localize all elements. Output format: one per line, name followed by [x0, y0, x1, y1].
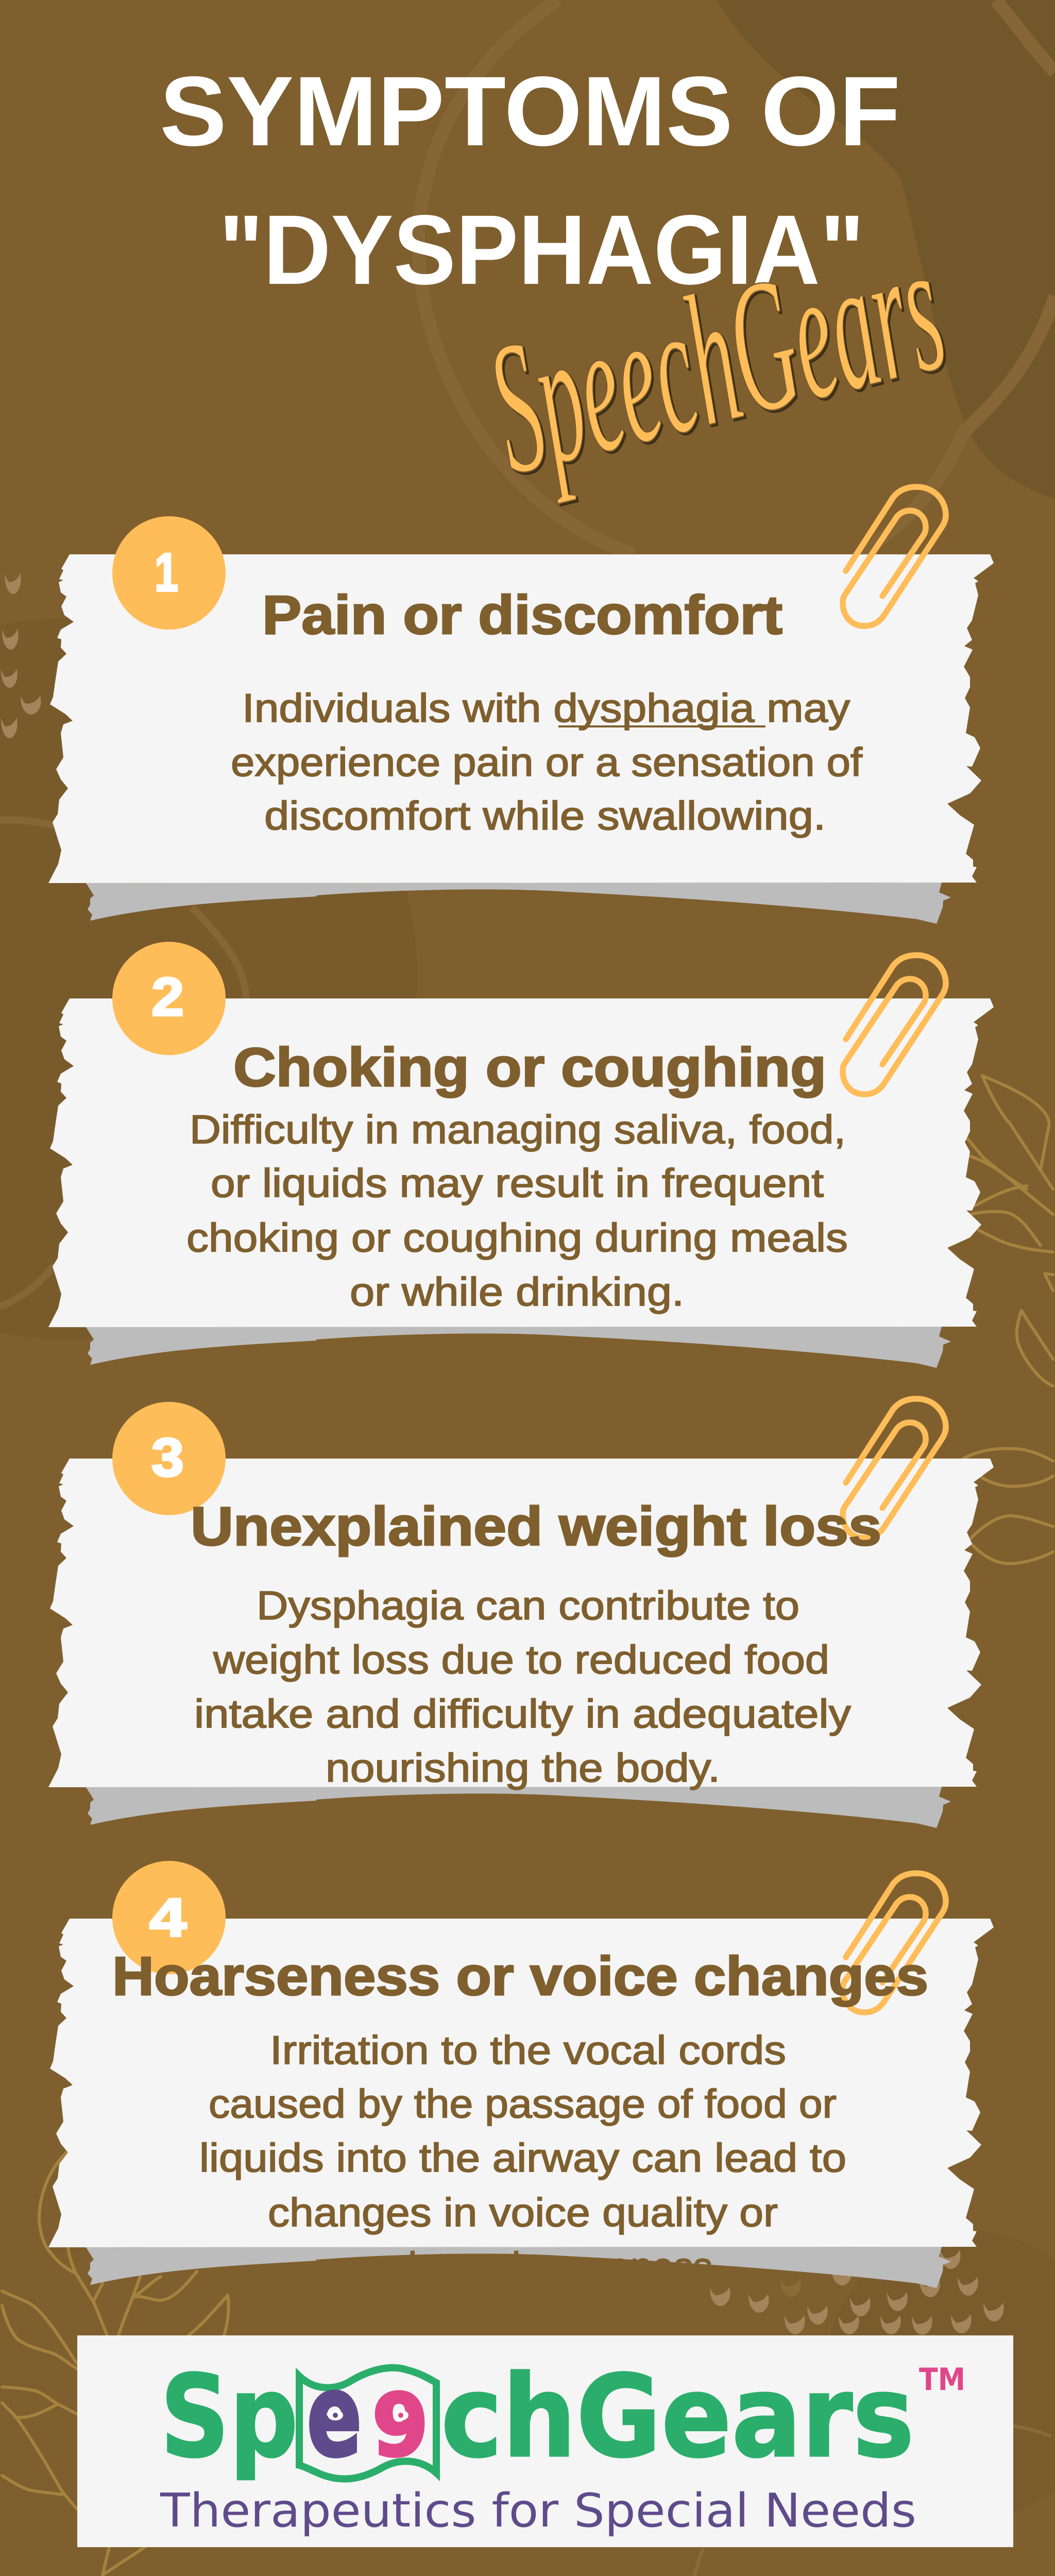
body text 4: liquids into the airway can lead to: [199, 2135, 846, 2180]
logo wordmark: [160, 2350, 914, 2483]
decorative leaves right: [963, 1076, 1053, 1564]
body text 1: discomfort while swallowing.: [264, 793, 826, 838]
logo eyes: [328, 2410, 409, 2420]
body text 2: [186, 1107, 848, 1314]
trademark: TM: [919, 2362, 965, 2398]
logo wordmark: Sp: [160, 2351, 298, 2483]
number badge 2: [112, 942, 226, 1055]
body text 3: weight loss due to reduced food: [213, 1637, 829, 1682]
number badge 4: [112, 1861, 226, 1974]
body text 3: nourishing the body.: [326, 1745, 720, 1790]
body text 1: experience pain or a sensation of: [231, 739, 862, 785]
body text 4: changes in voice quality or: [268, 2190, 778, 2235]
logo wordmark: chGears: [441, 2351, 914, 2483]
number badge 3: [112, 1402, 226, 1515]
logo wordmark: e: [307, 2350, 362, 2482]
number badge 1: 1: [155, 543, 178, 603]
heading 4: Hoarseness or voice changes: [112, 1946, 928, 2007]
paperclip 2: [843, 955, 946, 1094]
script signature: SpeechGears: SpeechGears: [471, 201, 962, 514]
paper 3: [48, 1459, 994, 1828]
body text 4: Irritation to the vocal cords: [270, 2027, 786, 2073]
logo book frame: [299, 2368, 436, 2479]
body text 4: [199, 2027, 846, 2289]
logo wordmark: 9: [372, 2376, 428, 2475]
title: [160, 56, 900, 305]
body text 2: or while drinking.: [350, 1269, 684, 1314]
decorative dots top left: [1, 573, 41, 738]
title: SYMPTOMS OF: [160, 56, 900, 166]
logo panel: [77, 2335, 1013, 2547]
card 1: pain or discomfort: [48, 487, 994, 924]
paper 2: [48, 998, 994, 1368]
body text 3: intake and difficulty in adequately: [194, 1691, 851, 1736]
decorative leaves lower left: [2, 2151, 229, 2576]
card 3: unexplained weight loss: [48, 1399, 994, 1828]
heading 3: Unexplained weight loss: [191, 1496, 881, 1557]
body text 3: [194, 1583, 851, 1790]
card 4: hoarseness or voice changes: [48, 1861, 994, 2289]
body text 1: Individuals with dysphagia may: [242, 685, 850, 731]
number badge 2: 2: [151, 967, 184, 1027]
tagline: Therapeutics for Special Needs: [160, 2484, 916, 2538]
card 2: choking or coughing: [48, 942, 994, 1368]
paperclip 1: [843, 487, 946, 626]
paper 4: [48, 1919, 994, 2288]
body text 1: [231, 685, 862, 838]
number badge 3: 3: [151, 1428, 184, 1488]
body text 2: or liquids may result in frequent: [211, 1160, 824, 1206]
body text 3: Dysphagia can contribute to: [257, 1583, 799, 1628]
body text 2: choking or coughing during meals: [186, 1215, 848, 1260]
title: "DYSPHAGIA": [219, 194, 864, 305]
number badge 4: 4: [149, 1888, 186, 1948]
body text 2: Difficulty in managing saliva, food,: [190, 1107, 846, 1152]
heading 1: Pain or discomfort: [262, 585, 782, 646]
paperclip 4: [843, 1873, 946, 2012]
decorative dots bottom right: [710, 2250, 1004, 2335]
paper 1: [48, 554, 994, 924]
heading 2: Choking or coughing: [233, 1037, 826, 1098]
number badge 1: [112, 516, 226, 630]
body text 4: persistent hoarseness.: [333, 2244, 723, 2289]
body text 4: caused by the passage of food or: [209, 2081, 837, 2126]
paperclip 3: [843, 1399, 946, 1538]
